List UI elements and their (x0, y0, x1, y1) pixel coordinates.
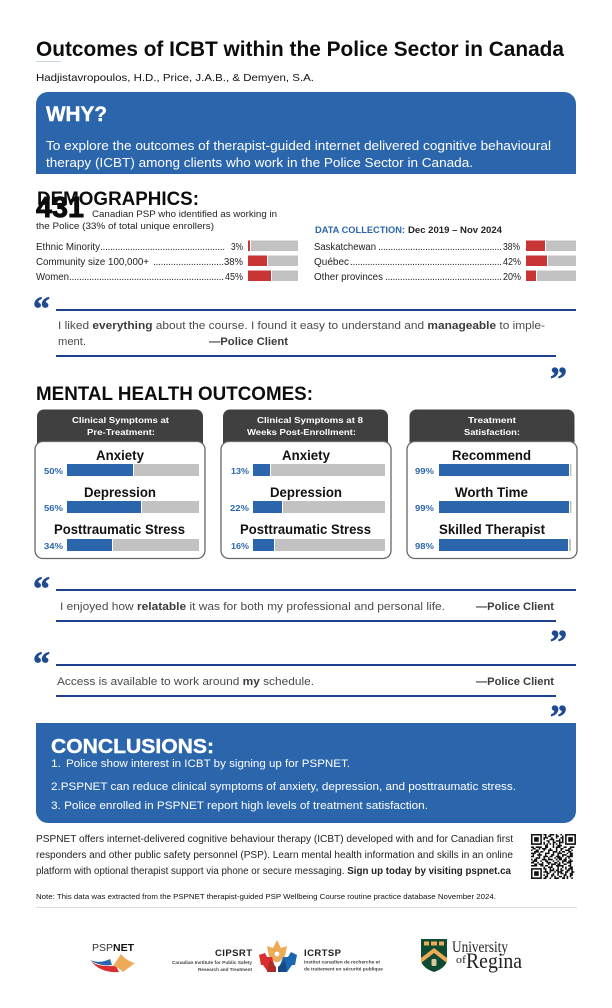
chart: demographics left: .................................................. (100, 242, 225, 253)
panel: 8 weeks post-enrollment symptoms (221, 410, 391, 558)
panel: treatment satisfaction: Recommend (452, 448, 531, 463)
panel: 8 weeks post-enrollment symptoms: 16% (231, 541, 249, 551)
chart: demographics left (36, 240, 298, 283)
stat description (36, 209, 277, 231)
quote 1: “ (33, 291, 50, 328)
panel: 8 weeks post-enrollment symptoms: Clinical Symptoms at 8 (257, 415, 363, 425)
conclusions list: 3. Police enrolled in PSPNET report high levels of treatment satisfaction. (51, 800, 428, 812)
footer description: responders and other public safety personnel (PSP). Learn mental health information and skills in an online (36, 850, 514, 861)
quote 2: “ (33, 571, 50, 608)
chart: demographics left: ............................ (153, 257, 224, 268)
conclusions list: 2.PSPNET can reduce clinical symptoms of anxiety, depression, and posttraumatic stress. (51, 781, 516, 793)
logo: University of Regina: University (452, 939, 508, 956)
panel: conclusions (36, 723, 576, 823)
chart: demographics left: 45% (225, 272, 243, 283)
heading: why: WHY? (46, 103, 107, 126)
panel: 8 weeks post-enrollment symptoms: Posttraumatic Stress (240, 522, 371, 537)
quote 2: I enjoyed how relatable it was for both my professional and personal life. (60, 601, 445, 613)
panel: pre-treatment symptoms: 56% (44, 503, 63, 513)
quote 3: ” (550, 699, 567, 736)
chart: demographics left: 38% (224, 257, 243, 268)
why text: therapy (ICBT) among clients who work in the Police Sector in Canada. (46, 156, 473, 170)
panel: 8 weeks post-enrollment symptoms: Depression (270, 485, 342, 500)
quote 3: Access is available to work around my schedule. (57, 676, 314, 688)
heading: conclusions: CONCLUSIONS: (51, 735, 214, 758)
note: Note: This data was extracted from the PSPNET therapist-guided PSP Wellbeing Course routine practice database November 2024. (36, 892, 496, 901)
chart: demographics right: 20% (503, 272, 521, 283)
footer description: platform with optional therapist support via phone or secure messaging. Sign up today by visiting pspnet.ca (36, 866, 512, 877)
logo: ICRTSP: de traitement en sécurité publique (304, 966, 383, 972)
panel: 8 weeks post-enrollment symptoms: 13% (231, 466, 249, 476)
chart: demographics right: 42% (503, 257, 521, 268)
data collection dates: DATA COLLECTION: (315, 224, 405, 235)
chart: demographics right: 38% (503, 242, 520, 253)
panel: pre-treatment symptoms: 34% (44, 541, 63, 551)
panel: treatment satisfaction: 98% (415, 541, 434, 551)
chart: demographics right (314, 240, 576, 283)
chart: demographics left: Ethnic Minority (36, 242, 100, 253)
why text (46, 139, 551, 170)
logo: PSPNET (90, 943, 135, 972)
panel: treatment satisfaction (407, 410, 577, 558)
chart: demographics right: Other provinces (314, 272, 383, 283)
logo: ICRTSP: ICRTSP (304, 948, 342, 959)
chart: demographics right: ............................................................. (350, 257, 502, 268)
panel: why (36, 92, 576, 174)
panel: treatment satisfaction: Skilled Therapist (439, 522, 545, 537)
quote 1 (33, 291, 576, 398)
quote 1: —Police Client (209, 336, 288, 348)
quote 1: ment. (58, 336, 86, 348)
conclusions list (51, 758, 516, 812)
panel: 8 weeks post-enrollment symptoms: 22% (230, 503, 249, 513)
logo: University of Regina (421, 939, 522, 973)
chart: demographics left: Women (36, 272, 69, 283)
logo: ICRTSP: Institut canadien de recherche et (304, 960, 380, 966)
title: Outcomes of ICBT within the Police Sector in Canada (36, 38, 564, 61)
chart: demographics left: Community size 100,000+ (36, 257, 149, 268)
chart: demographics left: 3% (231, 242, 243, 253)
logo: CIPSRT: CIPSRT (215, 948, 252, 959)
panel: pre-treatment symptoms: 50% (44, 466, 63, 476)
chart: demographics right: Québec (314, 257, 349, 268)
panel: treatment satisfaction: Satisfaction: (464, 427, 520, 437)
panel: treatment satisfaction: Worth Time (455, 485, 528, 500)
QR code (531, 834, 576, 879)
heading: demographics: DEMOGRAPHICS: (37, 188, 199, 210)
logo: maple leaf (259, 940, 297, 972)
stat description: Canadian PSP who identified as working in (92, 209, 277, 219)
chart: demographics left: .............................................................. (69, 272, 224, 283)
conclusions list: 1. (51, 758, 61, 770)
logo: CIPSRT: Research and Treatment (198, 967, 252, 973)
logo: CIPSRT (172, 948, 252, 973)
panel: pre-treatment symptoms: Clinical Symptoms at (72, 415, 169, 425)
logo: ICRTSP (304, 948, 383, 972)
panel: pre-treatment symptoms (35, 410, 205, 558)
conclusions list: Police show interest in ICBT by signing up for PSPNET. (66, 758, 350, 770)
footer description (36, 834, 514, 877)
panel: pre-treatment symptoms: Depression (84, 485, 156, 500)
logo: CIPSRT: Canadian Institute for Public Safety (172, 960, 252, 966)
quote 2: —Police Client (476, 601, 554, 613)
quote 1: ” (550, 361, 567, 398)
quote 3: “ (33, 646, 50, 683)
panel: pre-treatment symptoms: Anxiety (96, 448, 144, 463)
quote 2: ” (550, 624, 567, 661)
heading: mental health outcomes: MENTAL HEALTH OUTCOMES: (36, 383, 313, 405)
chart: demographics right: .................................................. (378, 242, 502, 253)
data collection dates (315, 224, 503, 235)
panel: pre-treatment symptoms: Posttraumatic Stress (54, 522, 185, 537)
panel: 8 weeks post-enrollment symptoms: Anxiety (282, 448, 330, 463)
stat description: the Police (33% of total unique enrollers) (36, 221, 214, 231)
quote 1: I liked everything about the course. I found it easy to understand and manageable to imple- (58, 320, 545, 332)
panel: 8 weeks post-enrollment symptoms: Weeks Post-Enrollment: (247, 427, 356, 437)
chart: demographics right: ............................................... (385, 272, 502, 283)
why text: To explore the outcomes of therapist-guided internet delivered cognitive behavioural (46, 139, 551, 153)
stat: 431 enrollers: 431 (36, 192, 84, 224)
quote 3: —Police Client (476, 676, 554, 688)
logo: University of Regina: of (456, 955, 467, 966)
chart: demographics right: Saskatchewan (314, 242, 376, 253)
panel: treatment satisfaction: 99% (415, 466, 434, 476)
data collection dates: Dec 2019 – Nov 2024 (408, 224, 503, 235)
logo: University of Regina: Regina (466, 948, 522, 973)
footer description: PSPNET offers internet-delivered cognitive behaviour therapy (ICBT) developed with and for Canadian first (36, 834, 513, 845)
quote 2 (33, 571, 576, 661)
panel: treatment satisfaction: 99% (415, 503, 434, 513)
panel: treatment satisfaction: Treatment (468, 415, 516, 425)
authors: Hadjistavropoulos, H.D., Price, J.A.B., & Demyen, S.A. (36, 72, 314, 84)
panel: pre-treatment symptoms: Pre-Treatment: (87, 427, 155, 437)
logo: PSPNET: PSPNET (92, 943, 134, 954)
quote 3 (33, 646, 576, 736)
